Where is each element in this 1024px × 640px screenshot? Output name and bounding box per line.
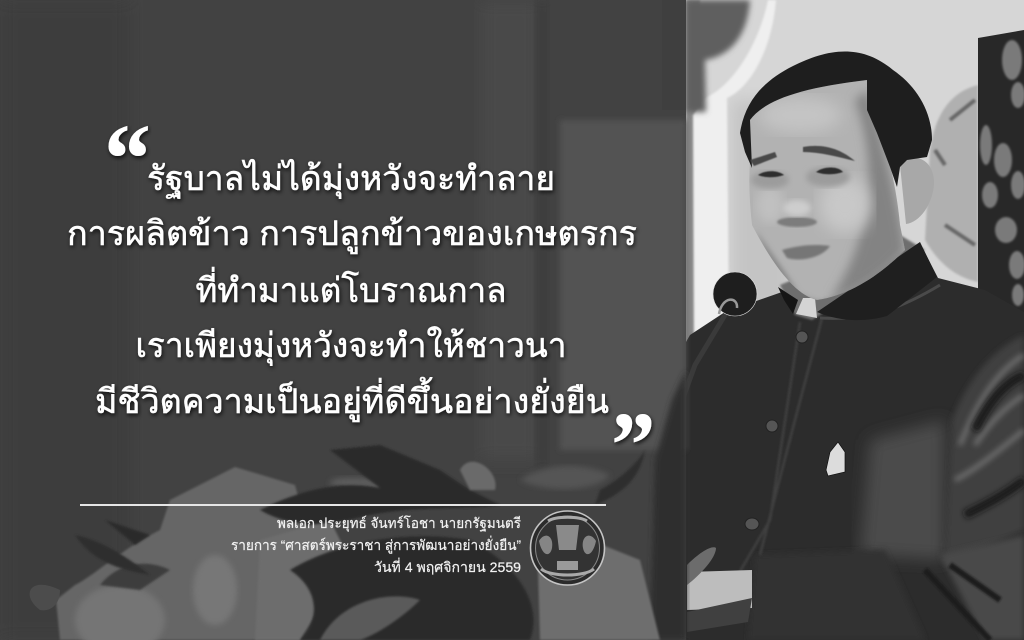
main quote text: การผลิตข้าว การปลูกข้าวของเกษตรกร	[67, 215, 637, 254]
main quote text: มีชีวิตความเป็นอยู่ที่ดีขึ้นอย่างยั่งยืน	[95, 377, 609, 422]
main quote text	[67, 159, 637, 422]
nose	[783, 200, 811, 216]
closing quotation mark: ”	[606, 394, 653, 498]
dark panel	[0, 0, 686, 640]
attribution text	[231, 515, 521, 575]
attribution text: รายการ “ศาสตร์พระราชา สู่การพัฒนาอย่างยั่งยืน”	[231, 536, 521, 554]
opening quotation mark: “	[99, 103, 149, 214]
eyebrows	[750, 146, 855, 166]
main quote text: ที่ทำมาแต่โบราณกาล	[196, 267, 506, 310]
attribution text: พลเอก ประยุทธ์ จันทร์โอชา นายกรัฐมนตรี	[277, 515, 521, 532]
lapel pin	[826, 442, 845, 476]
shirt	[796, 298, 817, 318]
attribution text: วันที่ 4 พฤศจิกายน 2559	[374, 558, 521, 575]
hand	[687, 547, 752, 632]
hair	[740, 51, 932, 187]
panel background tones	[0, 0, 686, 640]
face	[749, 80, 905, 300]
microphone	[675, 272, 757, 420]
collar	[817, 242, 937, 320]
jacket	[640, 243, 1024, 640]
flower arrangement	[30, 445, 660, 640]
icon: government seal	[530, 511, 604, 585]
mouth	[782, 245, 830, 260]
eyes	[758, 168, 843, 177]
main quote text: รัฐบาลไม่ได้มุ่งหวังจะทำลาย	[147, 159, 555, 199]
face shading	[751, 90, 905, 310]
portrait of speaker	[686, 52, 1024, 640]
main quote text: เราเพียงมุ่งหวังจะทำให้ชาวนา	[136, 326, 566, 366]
ear	[900, 158, 934, 224]
jacket highlights	[735, 285, 1024, 640]
divider rule	[80, 504, 606, 506]
buttons	[745, 331, 808, 530]
neck shadow	[780, 235, 925, 320]
dark leaves	[260, 445, 500, 524]
